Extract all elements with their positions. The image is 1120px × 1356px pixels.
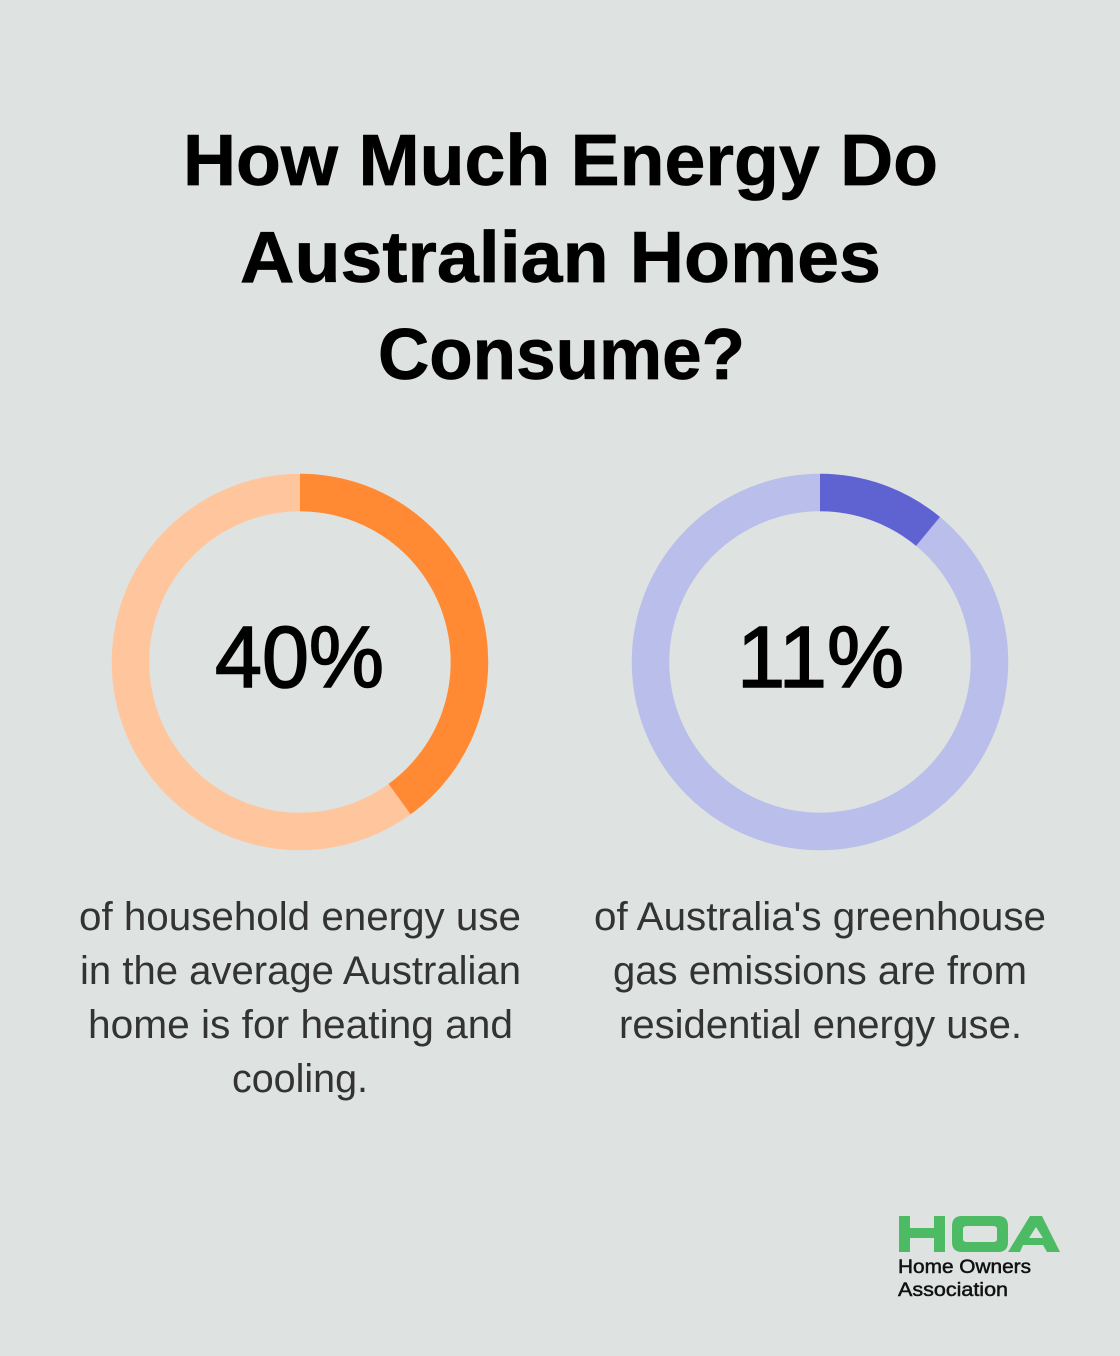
donut chart: 40% — [130, 492, 470, 832]
donut chart: 11% — [650, 492, 990, 832]
label: 11%: 11% — [737, 609, 904, 706]
title: How Much Energy Do — [183, 121, 938, 201]
text block: greenhouse gas emissions: gas emissions are from — [613, 949, 1027, 993]
logo letter A — [1008, 1216, 1060, 1252]
logo letter O — [952, 1216, 1008, 1252]
text block: greenhouse gas emissions: of Australia's greenhouse — [594, 895, 1046, 939]
label: 40%: 40% — [215, 609, 384, 706]
text block: heating and cooling: of household energy use — [79, 895, 521, 939]
text block: heating and cooling: home is for heating and — [88, 1003, 513, 1047]
logo: Home Owners Association — [898, 1216, 1060, 1301]
title: Consume? — [378, 315, 745, 395]
logo letter H — [899, 1216, 945, 1252]
title — [183, 121, 938, 395]
text block: greenhouse gas emissions — [594, 895, 1046, 1047]
logo text: Home Owners — [898, 1256, 1031, 1278]
logo text: Association — [898, 1279, 1008, 1301]
text block: heating and cooling: in the average Australian — [80, 949, 521, 993]
logo text — [898, 1256, 1031, 1301]
text block: heating and cooling — [79, 895, 521, 1101]
text block: heating and cooling: cooling. — [232, 1057, 368, 1101]
title: Australian Homes — [240, 218, 881, 298]
text block: greenhouse gas emissions: residential energy use. — [619, 1003, 1022, 1047]
